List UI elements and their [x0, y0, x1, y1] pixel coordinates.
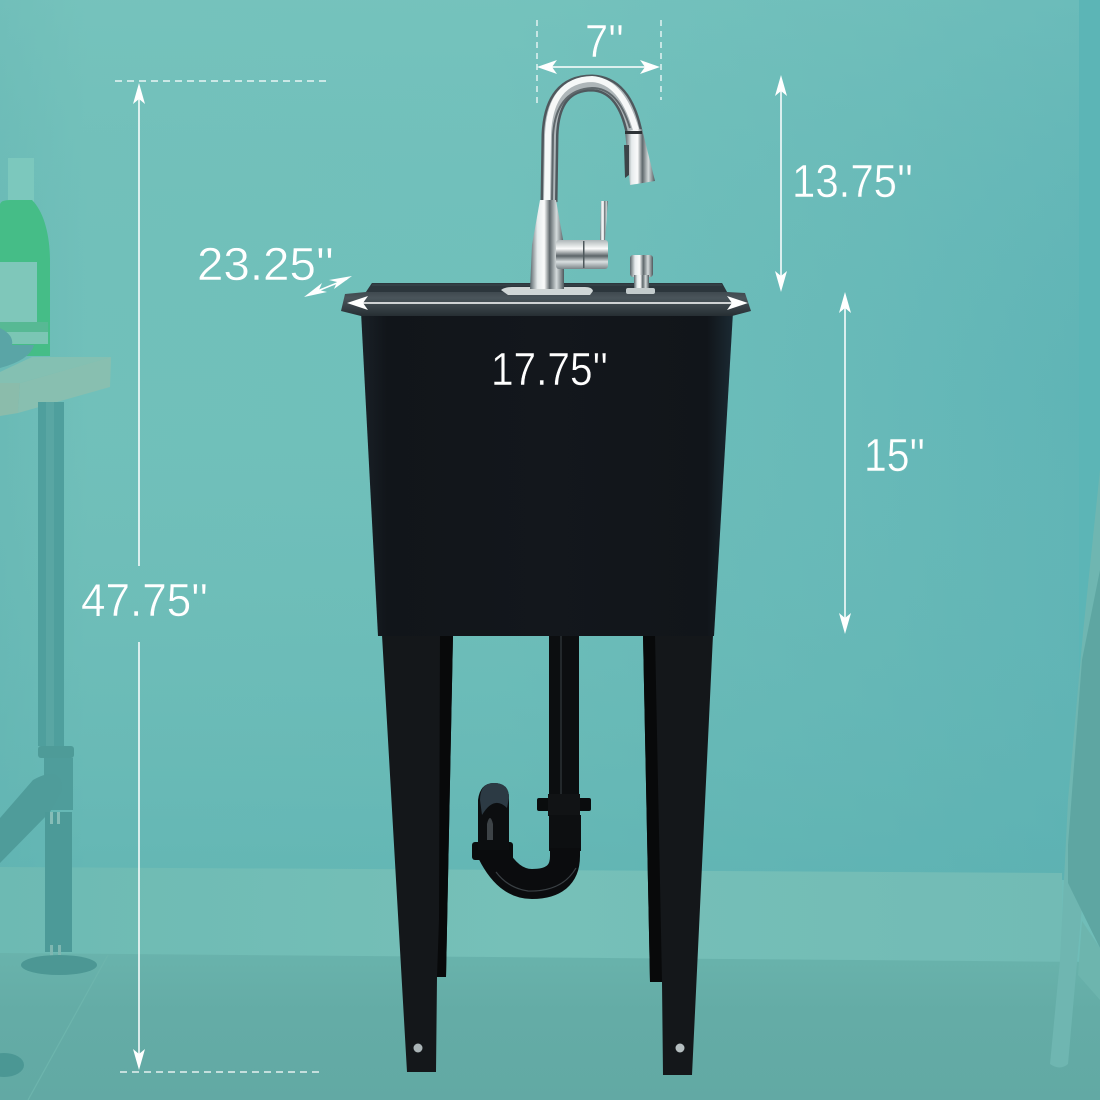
tub rim — [341, 283, 751, 316]
tub body — [361, 312, 733, 636]
dimension: 17.75 inch width: 17.75'' — [491, 343, 608, 395]
drain trap — [472, 634, 591, 891]
dimension: 23.25 inch depth: 23.25'' — [197, 238, 334, 290]
dimension: 7 inch faucet reach — [537, 15, 661, 103]
dimension: 15 inch basin depth: 15'' — [864, 429, 925, 481]
cloth — [0, 328, 34, 368]
soap dispenser — [626, 255, 655, 294]
pipe — [38, 402, 64, 746]
dimension: 47.75 inch overall height: 47.75'' — [81, 574, 208, 626]
bottle — [0, 158, 50, 356]
dimension: 13.75 inch faucet height: 13.75'' — [792, 155, 913, 207]
dimension: 15 inch basin depth — [839, 292, 925, 634]
dimension: 13.75 inch faucet height — [775, 75, 913, 292]
background: chair at right — [1050, 470, 1100, 1068]
sink — [341, 79, 751, 1075]
dimension: 17.75 inch width — [347, 296, 748, 395]
legs — [382, 635, 713, 1075]
dimension: 47.75 inch overall height — [81, 81, 328, 1072]
dimension: 7 inch faucet reach: 7'' — [585, 15, 624, 67]
shelf — [0, 357, 111, 383]
background: floor — [0, 953, 1100, 1100]
background: shelf with bottle and pipe table — [0, 158, 111, 1077]
background: baseboard — [0, 867, 1062, 965]
faucet — [501, 79, 655, 295]
background: wall — [0, 0, 1100, 880]
